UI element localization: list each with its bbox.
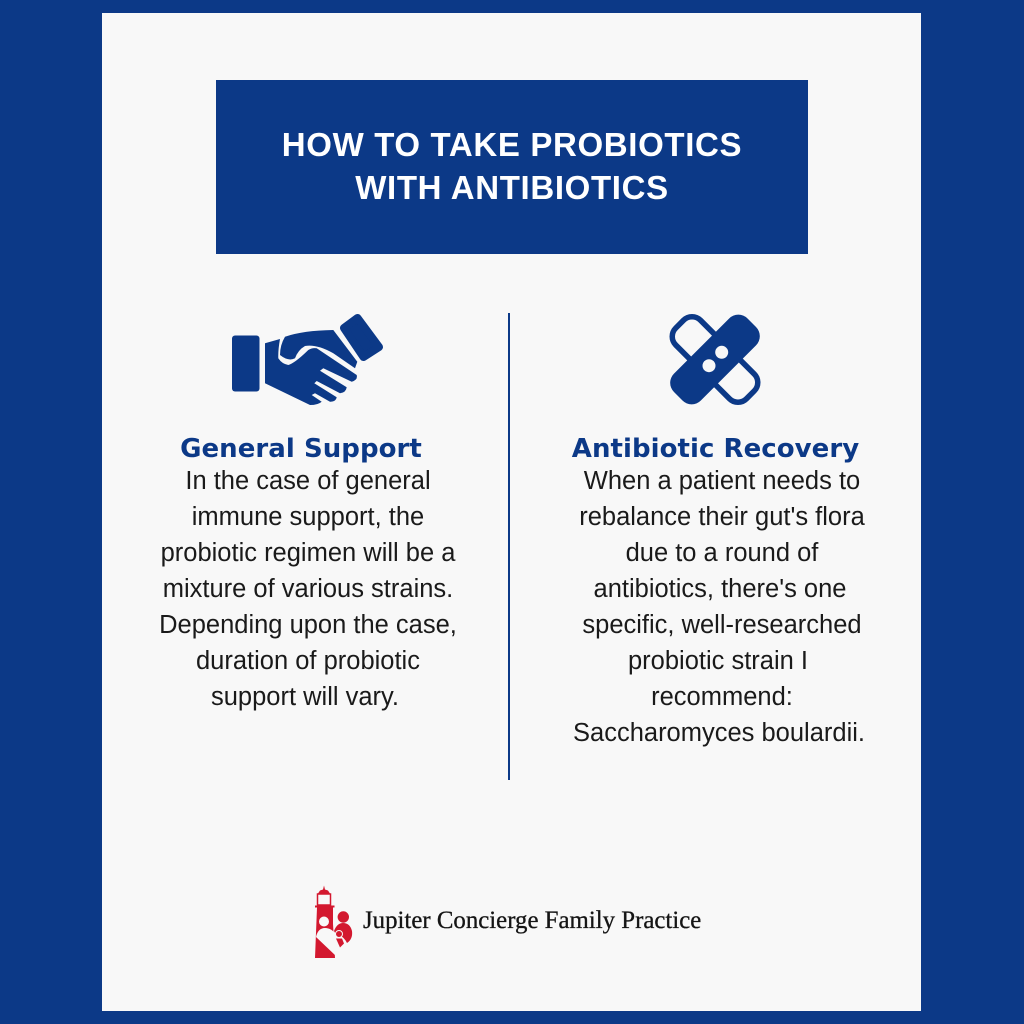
text block: general support body: immune support, the <box>192 503 424 531</box>
text block: antibiotic recovery body: specific, well-researched <box>582 611 862 639</box>
icon: lighthouse with family <box>315 886 352 958</box>
text block: general support body: mixture of various strains. <box>163 575 453 603</box>
text block: general support body: duration of probiotic <box>196 647 420 675</box>
logo: Jupiter Concierge Family Practice <box>315 886 701 958</box>
text block: general support body: In the case of general <box>185 467 431 495</box>
text block: antibiotic recovery body: rebalance their gut's flora <box>579 503 865 531</box>
title text <box>282 126 742 206</box>
heading: General Support: General Support <box>180 434 422 464</box>
text block: general support body: Depending upon the case, <box>159 611 457 639</box>
text block: antibiotic recovery body: due to a round of <box>626 539 818 567</box>
column divider <box>508 313 510 780</box>
title text: HOW TO TAKE PROBIOTICS <box>282 126 742 163</box>
text block: antibiotic recovery body: recommend: <box>651 683 793 711</box>
heading: Antibiotic Recovery: Antibiotic Recovery <box>572 434 859 464</box>
text block: antibiotic recovery body: probiotic strain I <box>628 647 808 675</box>
text block: general support body <box>159 467 457 711</box>
text block: antibiotic recovery body: antibiotics, there's one <box>594 575 846 603</box>
panel: white card <box>102 13 921 1011</box>
text block: antibiotic recovery body: Saccharomyces boulardii. <box>573 719 865 747</box>
icon: bandage <box>670 314 760 405</box>
icon: handshake <box>232 314 383 405</box>
text block: general support body: support will vary. <box>211 683 399 711</box>
title text: WITH ANTIBIOTICS <box>355 169 669 206</box>
logo wordmark: Jupiter Concierge Family Practice <box>363 907 701 934</box>
text block: general support body: probiotic regimen will be a <box>161 539 455 567</box>
title banner <box>216 80 808 254</box>
text block: antibiotic recovery body: When a patient needs to <box>584 467 860 495</box>
text block: antibiotic recovery body <box>573 467 865 747</box>
